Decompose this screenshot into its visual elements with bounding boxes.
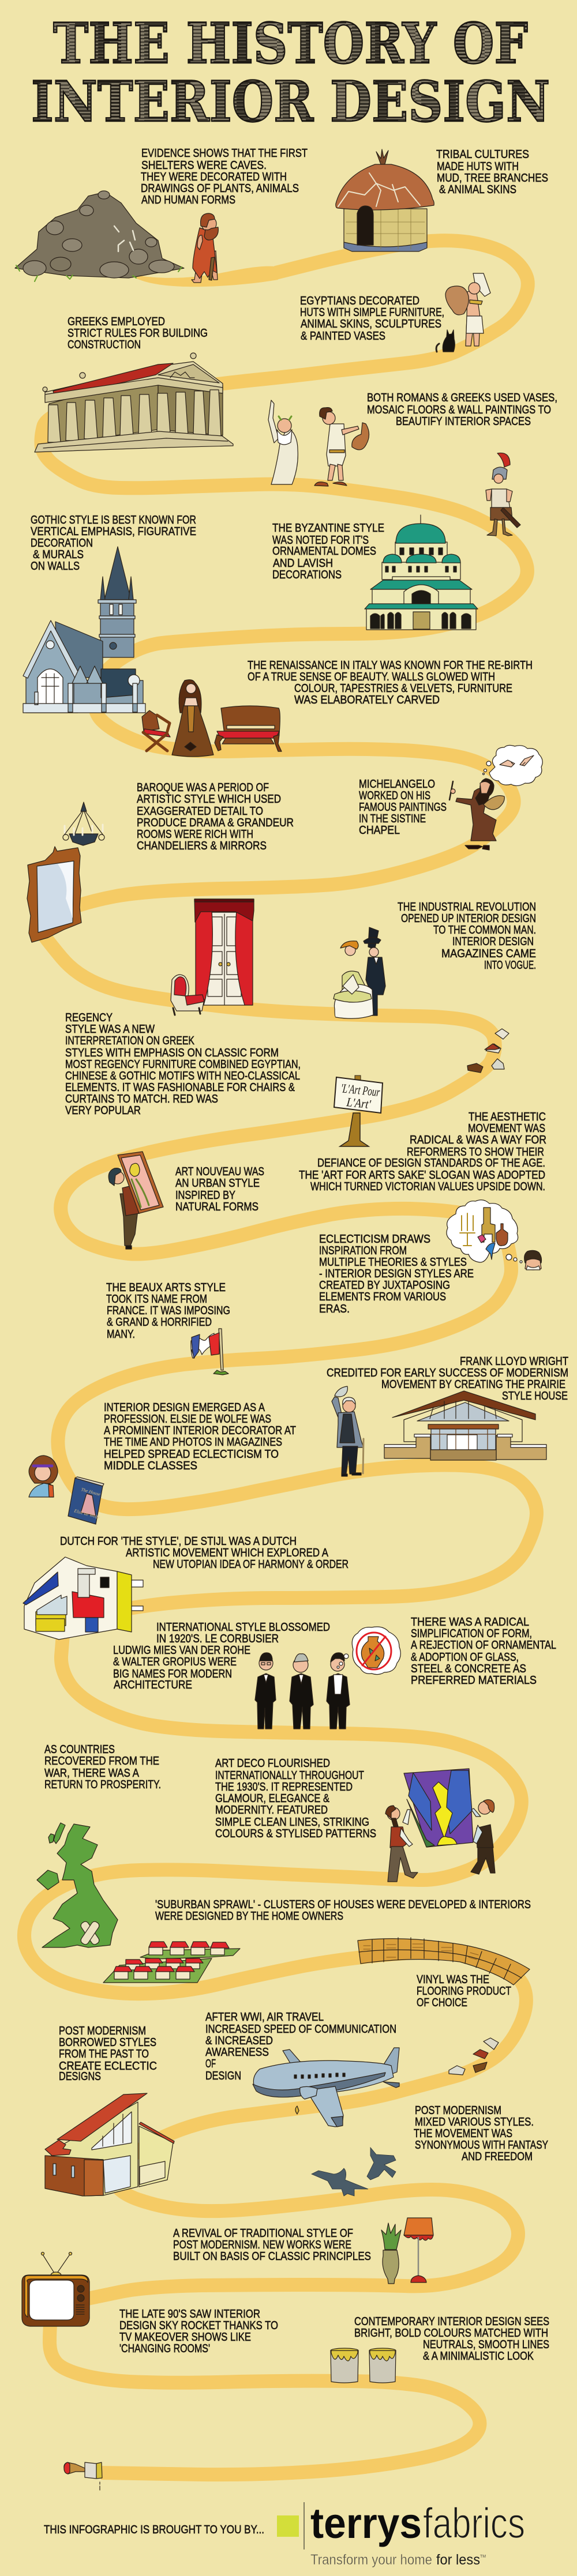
text: Renaissance: OF A TRUE SENSE OF BEAUTY. WALLS GLOWED WITH [248,671,495,683]
text: Art Deco: SIMPLE CLEAN LINES, STRIKING [215,1816,369,1829]
text: Beaux Arts: MANY. [107,1328,135,1341]
text: Renaissance: WAS ELABORATELY CARVED [294,694,440,706]
icon: UK map with plaster [37,1823,118,1947]
text: Romans and Greeks: BEAUTIFY INTERIOR SPACES [396,415,531,428]
text: Aesthetic movement: REFORMERS TO SHOW THEIR [407,1146,544,1159]
icon: ornate mirror [27,847,81,942]
text: Aesthetic movement: MOVEMENT WAS [468,1122,545,1135]
text: Gothic: & MURALS [33,548,84,561]
title [31,11,550,134]
text: Beaux Arts: & GRAND & HORRIFIED [107,1316,212,1329]
icon: curtains and door [194,899,254,1005]
icon: Byzantine cathedral [365,515,478,630]
text: post modernism fantasy: MIXED VARIOUS STYLES. [415,2116,534,2129]
text: Egyptians: & PAINTED VASES [301,330,385,343]
text: Industrial Revolution: OPENED UP INTERIOR DESIGN [401,912,536,925]
text: Baroque: ROOMS WERE RICH WITH [137,828,253,841]
text: Frank Lloyd Wright [327,1355,568,1402]
text: Michelangelo: CHAPEL [359,824,400,837]
text: Interior design profession: A PROMINENT INTERIOR DECORATOR AT [104,1424,296,1437]
icon: L'Art Pour L'Art sign: L'Art' [346,1095,372,1111]
text: after WWI air travel: INCREASED SPEED OF COMMUNICATION [205,2023,396,2036]
text: International style: & WALTER GROPIUS WERE [113,1656,237,1668]
text: post-war prosperity: RECOVERED FROM THE [44,1755,159,1768]
text: Art Nouveau [175,1165,264,1213]
text: post modernism fantasy: AND FREEDOM [462,2150,533,2163]
text: radical simplification: PREFERRED MATERIALS [411,1674,537,1687]
text: Gothic: ON WALLS [31,560,80,573]
text: International style: LUDWIG MIES VAN DER ROHE [113,1644,250,1657]
icon: red armchair [171,975,204,1015]
text: De Stijl: ARTISTIC MOVEMENT WHICH EXPLORED A [126,1547,329,1559]
text: vinyl: OF CHOICE [417,1996,467,2009]
text: post modernism borrowed: FROM THE PAST TO [59,2048,149,2060]
text: Gothic: VERTICAL EMPHASIS, FIGURATIVE [31,525,196,538]
icon: Gothic church [23,547,145,713]
text: brought to you by: THIS INFOGRAPHIC IS BROUGHT TO YOU BY... [44,2524,264,2536]
text: after WWI air travel [205,2011,396,2082]
text: radical simplification: & ADOPTION OF GLASS, [411,1651,519,1664]
icon: Renaissance woman, chair and settee [142,680,282,757]
text: Beaux Arts: TOOK ITS NAME FROM [106,1293,207,1306]
text: Aesthetic movement: THE AESTHETIC [469,1111,546,1123]
text: Eclecticism: MULTIPLE THEORIES & STYLES [319,1256,467,1269]
text: late 90s: 'CHANGING ROOMS' [119,2342,210,2355]
icon: aeroplane [253,2048,399,2127]
text: Regency: VERY POPULAR [65,1104,141,1117]
text: Michelangelo: MICHELANGELO [359,778,435,791]
text: Art Deco: COLOURS & STYLISED PATTERNS [215,1827,376,1840]
text: post-war prosperity [44,1743,161,1791]
winding paint trail [24,240,537,2475]
text: Romans and Greeks [367,392,557,428]
text: Baroque [137,781,294,852]
icon: Frank Lloyd Wright figure [332,1386,364,1476]
text: Beaux Arts [106,1281,230,1341]
logo: terrysfabrics: fabrics [423,2499,525,2547]
text: Byzantine [272,522,384,581]
text: International style: ARCHITECTURE [114,1679,192,1691]
icon: scattered books [449,2038,499,2075]
text: Regency: STYLES WITH EMPHASIS ON CLASSIC FORM [65,1047,279,1059]
icon: Egyptian with vase [445,273,490,346]
text: Interior design profession: PROFESSION. ELSIE DE WOLFE WAS [104,1413,271,1426]
icon: tribal hut [336,149,434,251]
text: International style: BIG NAMES FOR MODERN [113,1668,232,1680]
text: first shelters: SHELTERS WERE CAVES. [141,159,267,172]
icon: paint cans [331,2348,396,2383]
text: Egyptians: ANIMAL SKINS, SCULPTURES [301,318,441,330]
text: Gothic: DECORATION [31,537,93,550]
text: Aesthetic movement: RADICAL & WAS A WAY FOR [410,1134,546,1146]
text: Regency: ELEMENTS. IT WAS FASHIONABLE FOR CHAIRS & [65,1081,295,1094]
text: vinyl [417,1973,511,2009]
text: post-war prosperity: WAR, THERE WAS A [44,1767,140,1780]
icon: vase and plant [381,2223,401,2284]
text: Art Deco [215,1757,376,1840]
logo: terrysfabrics: Transform your home [310,2552,432,2568]
icon: old Greek man and youth with jug [268,400,369,486]
text: Byzantine: WAS NOTED FOR IT'S [272,534,369,547]
icon: prairie style house [384,1391,546,1460]
text: Art Nouveau: ART NOUVEAU WAS [175,1165,264,1178]
icon: man's head thinking [524,1250,541,1270]
text: Art Deco: ART DECO FLOURISHED [215,1757,330,1770]
text: Baroque: EXAGGERATED DETAIL TO [137,805,263,818]
text: Eclecticism: - INTERIOR DESIGN STYLES ARE [319,1268,474,1280]
text: Eclecticism: ELEMENTS FROM VARIOUS [319,1291,446,1303]
icon: The House in Good Taste book: The House [80,1487,102,1497]
text: Interior design profession: INTERIOR DESIGN EMERGED AS A [104,1401,265,1414]
text: Gothic: GOTHIC STYLE IS BEST KNOWN FOR [31,514,196,527]
text: Byzantine: DECORATIONS [272,569,342,581]
text: post modernism borrowed: BORROWED STYLES [59,2036,156,2049]
text: Regency: REGENCY [65,1011,113,1024]
text: after WWI air travel: & INCREASED [205,2035,273,2047]
text: after WWI air travel: DESIGN [205,2070,241,2082]
text: Michelangelo: IN THE SISTINE [359,813,426,825]
text: Renaissance: COLOUR, TAPESTRIES & VELVETS, FURNITURE [294,682,512,695]
text: contemporary: & A MINIMALISTIC LOOK [423,2350,534,2363]
icon: The House in Good Taste book: Elsie de Wolfe [73,1508,100,1520]
text: post-war prosperity: AS COUNTRIES [44,1743,115,1756]
text: Regency: CURTAINS TO MATCH. RED WAS [65,1093,218,1105]
text: International style: IN 1920'S. LE CORBUSIER [156,1633,279,1645]
text: De Stijl: DUTCH FOR 'THE STYLE', DE STIJL WAS A DUTCH [60,1535,297,1548]
icon: paint brush [64,2462,102,2490]
text: Interior design profession: HELPED SPREAD ECLECTICISM TO [104,1448,279,1461]
text: after WWI air travel: AWARENESS [205,2046,269,2059]
icon: parquet flooring [358,1938,530,1985]
icon: stack of books on the path [467,1029,509,1073]
text: first shelters: EVIDENCE SHOWS THAT THE FIRST [141,147,308,160]
icon: man carrying Art Nouveau panel [108,1152,163,1249]
text: late 90s [119,2308,278,2355]
text: Art Deco: GLAMOUR, ELEGANCE & [215,1792,330,1805]
text: Art Nouveau: NATURAL FORMS [175,1201,258,1213]
text: classical revival: BUILT ON BASIS OF CLASSIC PRINCIPLES [173,2250,371,2263]
icon: caveman [192,213,218,283]
text: first shelters: DRAWINGS OF PLANTS, ANIMALS [141,182,299,195]
text: Michelangelo [359,778,447,837]
text: Renaissance [248,659,533,706]
text: first shelters: AND HUMAN FORMS [141,194,235,206]
text: post modernism borrowed [59,2025,157,2083]
text: vinyl: FLOORING PRODUCT [417,1985,511,1998]
text: Regency: INTERPRETATION ON GREEK [65,1035,195,1047]
text: late 90s: DESIGN SKY ROCKET THANKS TO [119,2319,278,2332]
text: classical revival [173,2227,371,2263]
text: after WWI air travel: AFTER WWI, AIR TRAVEL [205,2011,324,2024]
icon: The House in Good Taste book [68,1477,104,1524]
text: Eclecticism: CREATED BY JUXTAPOSING [319,1279,450,1292]
icon: Roman soldier [486,453,520,536]
text: tribal cultures: & ANIMAL SKINS [439,183,516,196]
text: suburban sprawl: WERE DESIGNED BY THE HOME OWNERS [155,1910,343,1923]
text: Eclecticism: ECLECTICISM DRAWS [319,1233,430,1246]
text: Michelangelo: FAMOUS PAINTINGS [359,801,447,814]
text: Art Nouveau: AN URBAN STYLE [175,1177,260,1190]
text: Greeks: GREEKS EMPLOYED [68,315,165,328]
icon: no ornament thought cloud [337,1627,400,1675]
icon: Greek temple [35,353,233,452]
icon: two birds [312,2148,396,2196]
text: vinyl: VINYL WAS THE [417,1973,489,1986]
text: post modernism fantasy [414,2104,548,2163]
text: radical simplification: THERE WAS A RADICAL [411,1616,529,1629]
text: Industrial Revolution: INTO VOGUE. [484,959,536,972]
text: Industrial Revolution: THE INDUSTRIAL REVOLUTION [398,901,536,913]
icon: Michelangelo painting [449,779,504,850]
logo: terrysfabrics: for less [436,2552,480,2568]
text: Art Deco: INTERNATIONALLY THROUGHOUT [215,1769,364,1782]
text: Baroque: BAROQUE WAS A PERIOD OF [137,781,269,794]
text: Regency [65,1011,301,1117]
text: Byzantine: ORNAMENTAL DOMES [272,545,376,558]
text: Interior design profession: THE TIME AND PHOTOS IN MAGAZINES [104,1436,282,1449]
text: Regency: STYLE WAS A NEW [65,1023,155,1036]
icon: floor lamp [404,2218,433,2282]
text: late 90s: TV MAKEOVER SHOWS LIKE [119,2331,251,2344]
text: post modernism borrowed: DESIGNS [59,2070,101,2083]
text: De Stijl: NEW UTOPIAN IDEA OF HARMONY & ORDER [153,1558,349,1571]
text: Industrial Revolution: MAGAZINES CAME [441,947,536,960]
text: Gothic [31,514,196,573]
icon: men carrying Art Deco painting [385,1769,495,1882]
text: Greeks [68,315,208,351]
icon: three modernist architects [255,1653,350,1729]
text: Art Deco: THE 1930'S. IT REPRESENTED [215,1781,353,1793]
text: late 90s: THE LATE 90'S SAW INTERIOR [119,2308,260,2321]
text: classical revival: A REVIVAL OF TRADITIONAL STYLE OF [173,2227,353,2240]
text: Interior design profession [104,1401,296,1472]
text: Baroque: PRODUCE DRAMA & GRANDEUR [137,817,294,829]
text: tribal cultures [436,148,548,196]
text: suburban sprawl [155,1898,531,1923]
text: Industrial Revolution: TO THE COMMON MAN. [433,924,536,937]
text: Greeks: STRICT RULES FOR BUILDING [68,327,208,340]
text: after WWI air travel: OF [205,2058,216,2070]
text: Byzantine: THE BYZANTINE STYLE [272,522,384,535]
text: radical simplification: STEEL & CONCRETE AS [411,1663,526,1675]
text: Greeks: CONSTRUCTION [68,339,141,351]
text: post modernism borrowed: CREATE ECLECTIC [59,2060,157,2073]
text: Baroque: CHANDELIERS & MIRRORS [137,840,267,852]
icon: eclectic thought cloud [447,1200,522,1263]
text: Egyptians: HUTS WITH SIMPLE FURNITURE, [300,306,444,319]
text: tribal cultures: TRIBAL CULTURES [436,148,529,161]
logo: terrysfabrics: terrys [310,2499,422,2547]
text: classical revival: POST MODERNISM. NEW WORKS WERE [173,2239,351,2251]
text: radical simplification: SIMPLIFICATION OF FORM, [411,1627,532,1640]
text: contemporary [354,2315,549,2363]
text: International style: INTERNATIONAL STYLE BLOSSOMED [156,1621,330,1634]
text: contemporary: NEUTRALS, SMOOTH LINES [423,2338,549,2351]
text: tribal cultures: MUD, TREE BRANCHES [437,172,548,185]
text: post modernism fantasy: POST MODERNISM [415,2104,501,2117]
text: Egyptians [300,295,444,343]
text: Byzantine: AND LAVISH [273,557,333,570]
text: Art Nouveau: INSPIRED BY [175,1189,235,1202]
icon: French flag [191,1329,228,1375]
icon: L'Art Pour L'Art sign: 'L'Art Pour [340,1081,381,1099]
icon: L'Art Pour L'Art sign [334,1075,383,1146]
text: first shelters: THEY WERE DECORATED WITH [141,171,287,183]
text: Industrial Revolution [398,901,536,972]
text: Industrial Revolution: INTERIOR DESIGN [452,935,534,948]
text: De Stijl [60,1535,349,1571]
icon: Victorian couple [334,927,385,1018]
text: Eclecticism: ERAS. [319,1303,350,1315]
icon: Elsie de Wolfe [29,1456,58,1497]
text: Michelangelo: WORKED ON HIS [359,789,430,802]
text: Aesthetic movement [299,1111,546,1193]
text: Regency: MOST REGENCY FURNITURE COMBINED EGYPTIAN, [65,1058,301,1071]
text: post-war prosperity: RETURN TO PROSPERITY. [44,1778,161,1791]
text: Beaux Arts: THE BEAUX ARTS STYLE [106,1281,226,1294]
icon: suburban houses [103,1942,240,1983]
text: Egyptians: EGYPTIANS DECORATED [300,295,419,307]
text: Regency: CHINESE & GOTHIC MOTIFS WITH NEO-CLASSICAL [65,1070,300,1082]
text: Eclecticism [319,1233,474,1315]
icon: cave with paintings [15,191,184,281]
icon: thought cloud with Creation hands [482,745,542,786]
text: Art Deco: MODERNITY. FEATURED [215,1804,328,1817]
icon: chandelier [63,802,104,845]
text: Beaux Arts: FRANCE. IT WAS IMPOSING [107,1304,230,1317]
text: tribal cultures: MADE HUTS WITH [437,160,519,173]
icon: retro television [22,2252,89,2326]
text: Interior design profession: MIDDLE CLASSES [104,1460,197,1472]
text: Baroque: ARTISTIC STYLE WHICH USED [137,793,281,806]
text: post modernism borrowed: POST MODERNISM [59,2025,146,2037]
text: post modernism fantasy: THE MOVEMENT WAS [414,2127,512,2140]
text: radical simplification [411,1616,556,1687]
logo: terrysfabrics [277,2499,525,2568]
text: first shelters [141,147,308,206]
text: International style [113,1621,330,1691]
text: Eclecticism: INSPIRATION FROM [319,1244,407,1257]
logo: terrysfabrics: TM [480,2555,486,2559]
icon: black cat [436,330,455,352]
icon: modern house [45,2093,174,2196]
icon: De Stijl house [23,1557,143,1639]
